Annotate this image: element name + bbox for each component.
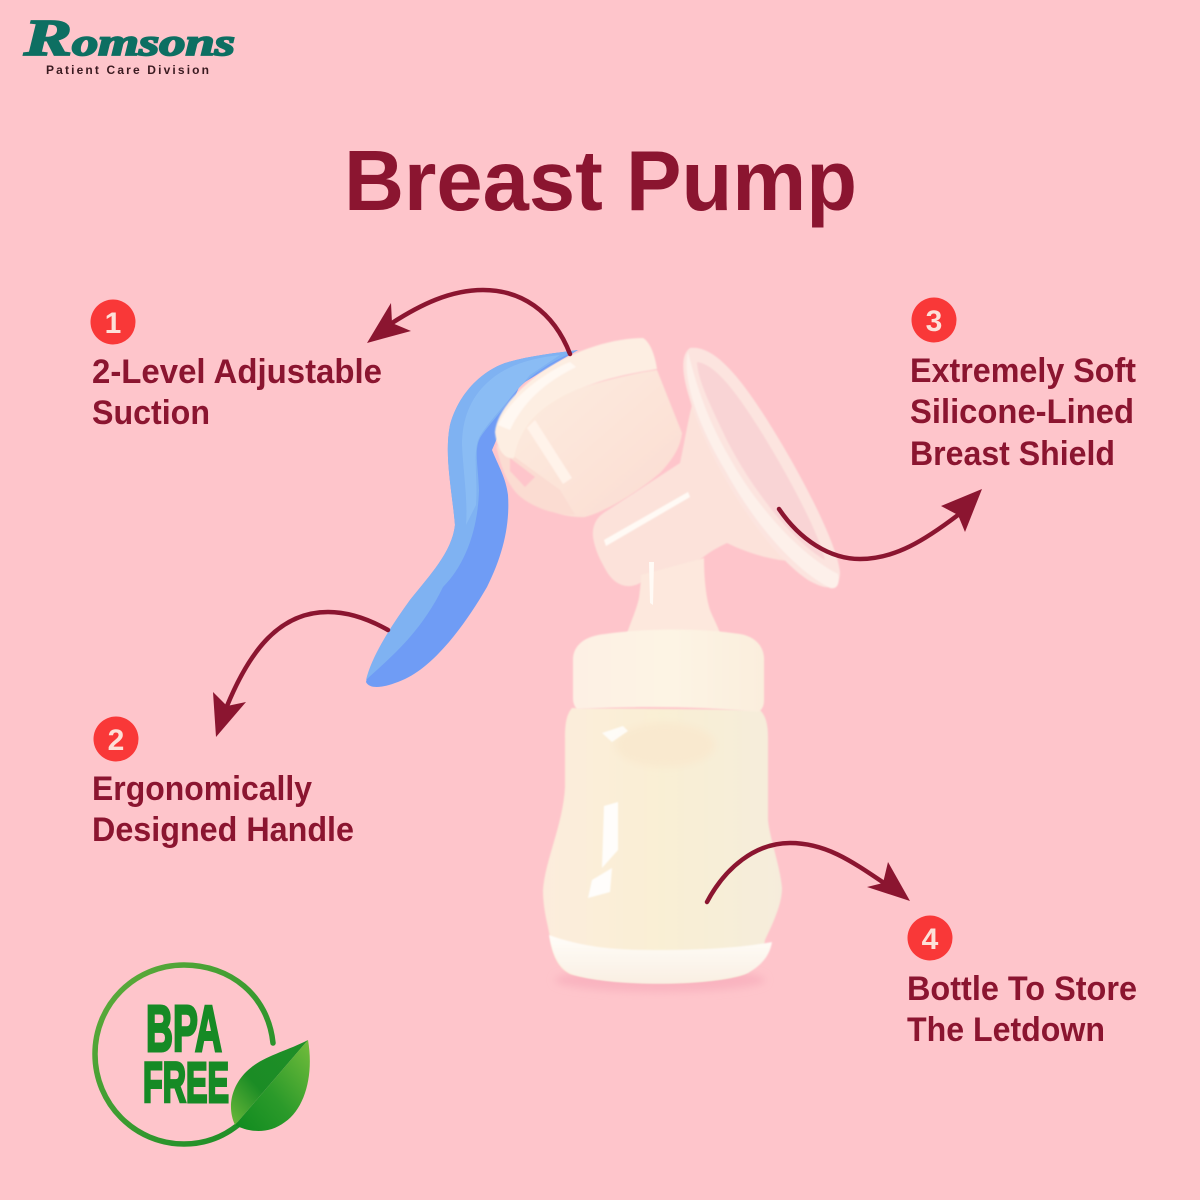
feature 1: suction xyxy=(90,300,382,432)
BPA free badge xyxy=(95,965,310,1144)
feature 3 label: Silicone-Lined xyxy=(910,393,1134,431)
housing body xyxy=(512,370,682,517)
neck stem xyxy=(625,558,722,640)
badge 4: 4 xyxy=(922,923,939,956)
badge ring xyxy=(95,965,273,1144)
stem highlight xyxy=(649,562,654,605)
feature 4 label: The Letdown xyxy=(907,1011,1105,1049)
badge text: BPA xyxy=(146,992,222,1065)
threaded ridges xyxy=(527,420,572,484)
feature 3 label: Extremely Soft xyxy=(910,352,1136,390)
arrow 4 xyxy=(707,843,910,902)
bottle cap xyxy=(573,630,764,712)
feature 2 label: Designed Handle xyxy=(92,811,354,849)
bottle milk shading xyxy=(615,723,715,767)
feature 3: breast shield xyxy=(910,298,1136,473)
arrow 3 xyxy=(779,489,982,559)
arrow 1 xyxy=(367,290,570,354)
badge 2: 2 xyxy=(108,724,124,757)
funnel connector xyxy=(593,405,790,586)
breast shield xyxy=(593,348,840,588)
badge 3 xyxy=(912,298,956,342)
pump handle xyxy=(366,350,578,687)
badge 4 xyxy=(908,916,952,960)
badge 1 xyxy=(90,300,136,344)
feature 2: handle xyxy=(92,716,354,849)
flange rim xyxy=(683,348,840,587)
top ring xyxy=(495,338,657,458)
badge text xyxy=(143,992,229,1115)
badge text: FREE xyxy=(143,1051,229,1115)
feature 1 label: 2-Level Adjustable xyxy=(92,353,382,391)
feature 4: bottle xyxy=(907,916,1137,1049)
product illustration: breast pump xyxy=(366,338,840,992)
locking tab xyxy=(496,445,575,515)
feature 3 label: Breast Shield xyxy=(910,435,1115,473)
logo: Romsons Patient Care Division xyxy=(23,10,235,77)
feature 4 label: Bottle To Store xyxy=(907,970,1137,1008)
logo: Romsons Patient Care Division: omsons xyxy=(72,22,235,64)
bottle white base xyxy=(549,935,772,984)
tab opening xyxy=(510,458,535,487)
logo: Romsons Patient Care Division: R xyxy=(23,10,72,67)
logo: Romsons Patient Care Division: Patient Care Division xyxy=(46,63,209,77)
arrow 2 xyxy=(213,612,388,737)
collar and valve housing xyxy=(495,338,682,517)
bottle highlights xyxy=(588,726,628,898)
icon: leaf xyxy=(231,1040,310,1131)
title: Breast Pump xyxy=(344,134,857,229)
feature 2 label: Ergonomically xyxy=(92,770,312,808)
badge 2 xyxy=(94,716,138,762)
bottle shadow xyxy=(555,968,765,992)
badge 3: 3 xyxy=(926,305,942,338)
badge 1: 1 xyxy=(105,307,121,340)
feature 1 label: Suction xyxy=(92,394,210,432)
bottle body xyxy=(543,708,782,983)
